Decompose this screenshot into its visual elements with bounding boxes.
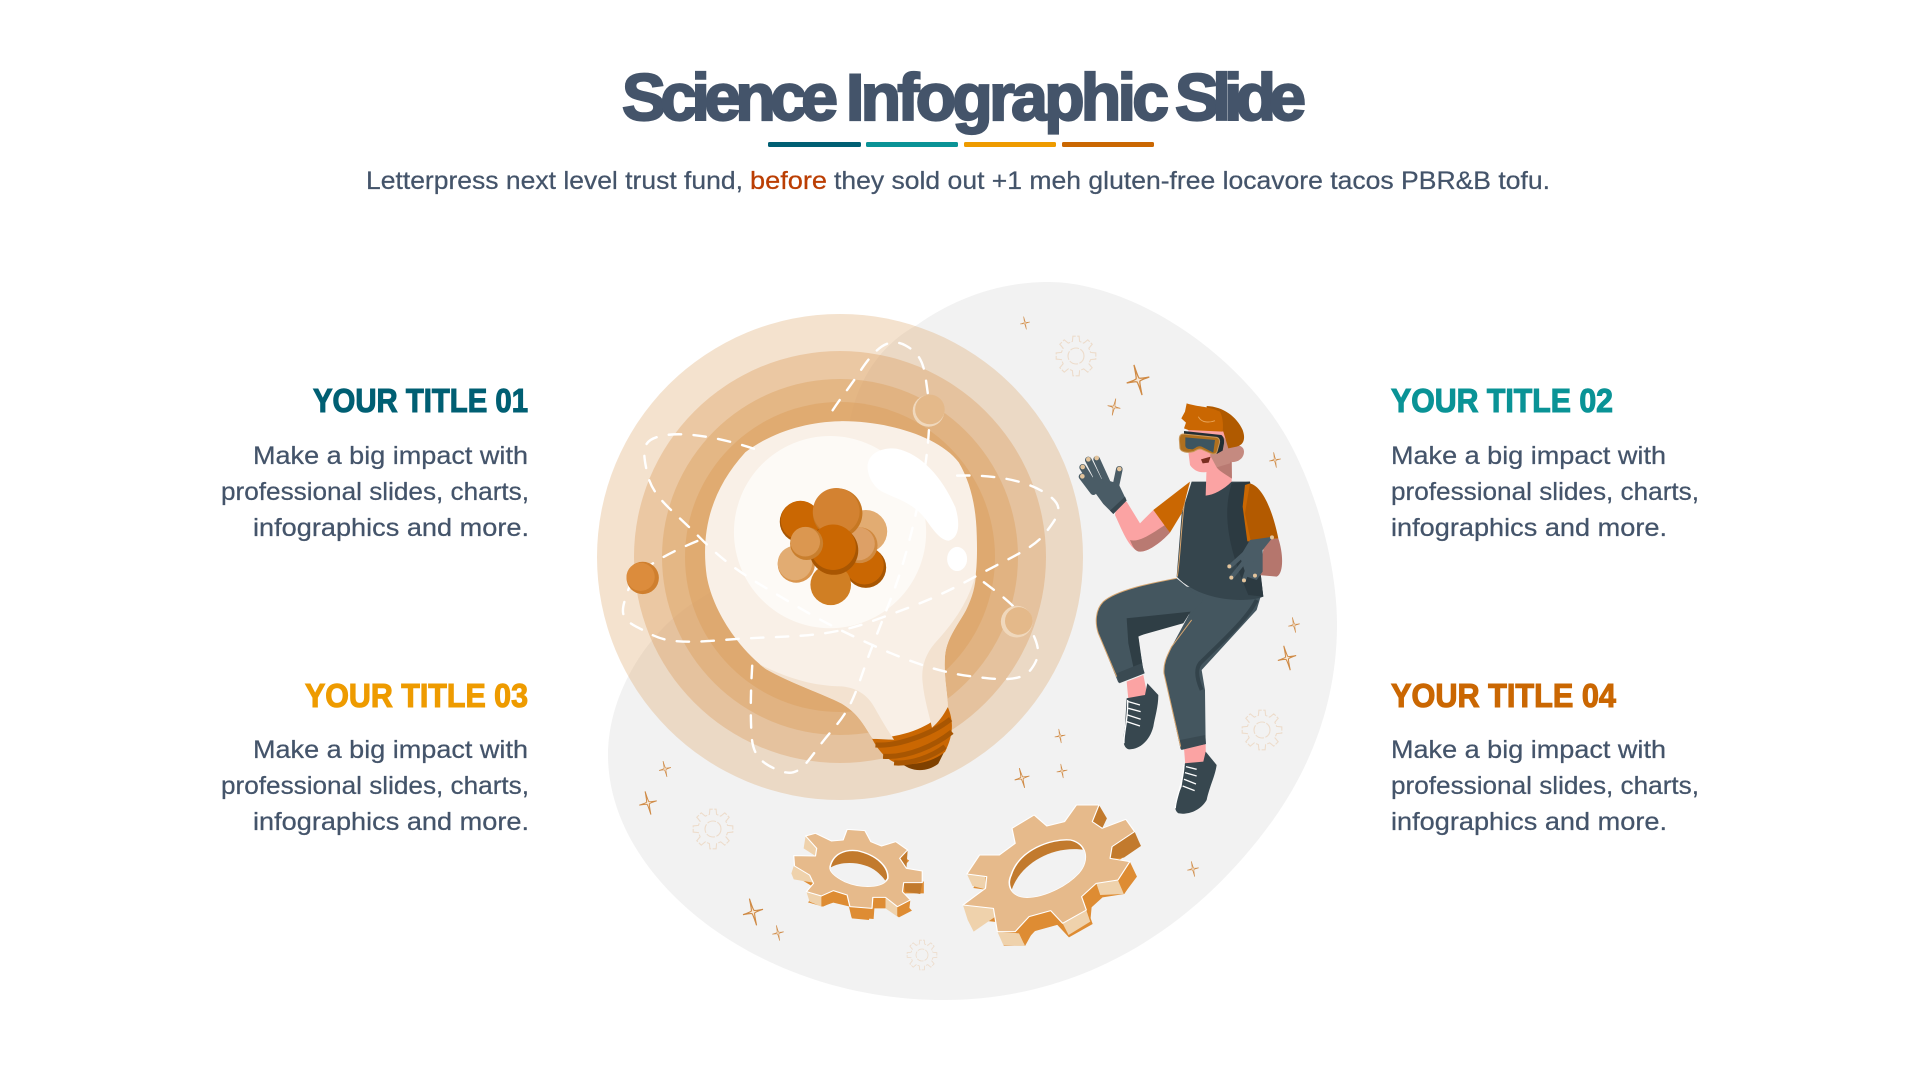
bulb shading bbox=[759, 573, 976, 740]
bulb inner glow bbox=[734, 436, 926, 628]
text block: title 01: Make a big impact with bbox=[253, 442, 528, 470]
text block: title 02: professional slides, charts, bbox=[1391, 478, 1699, 506]
VR goggles bbox=[1179, 431, 1224, 454]
hair bbox=[1181, 403, 1244, 448]
text block: title 01: infographics and more. bbox=[253, 514, 529, 542]
small gear bbox=[791, 829, 924, 920]
text block: title 03 bbox=[221, 677, 529, 836]
shoes bbox=[1124, 683, 1217, 814]
text block: title 04: Make a big impact with bbox=[1391, 736, 1666, 764]
text block: title 01 bbox=[221, 382, 529, 542]
title bbox=[622, 60, 1306, 134]
text block: title 04 bbox=[1391, 677, 1699, 836]
bulb screw base bbox=[872, 707, 952, 770]
title: Slide bbox=[1175, 60, 1306, 134]
neck and head bbox=[1188, 423, 1244, 496]
text block: title 04: infographics and more. bbox=[1391, 808, 1667, 836]
large gears bbox=[791, 805, 1141, 946]
text block: title 03: YOUR TITLE 03 bbox=[305, 677, 528, 714]
subtitle: before bbox=[750, 167, 827, 195]
right arm with raised glove bbox=[1080, 456, 1190, 552]
big gear bbox=[963, 805, 1141, 946]
text block: title 03: infographics and more. bbox=[253, 808, 529, 836]
floating person with VR goggles bbox=[1080, 403, 1282, 814]
text block: title 02 bbox=[1391, 382, 1699, 542]
title: Infographic bbox=[846, 60, 1169, 134]
subtitle: Letterpress next level trust fund, bbox=[366, 167, 743, 195]
legs and trousers bbox=[1096, 578, 1262, 765]
text block: title 01: YOUR TITLE 01 bbox=[313, 382, 528, 419]
text block: title 04: YOUR TITLE 04 bbox=[1391, 677, 1617, 714]
torso vest bbox=[1177, 482, 1263, 600]
light bulb and atom illustration bbox=[623, 342, 1058, 773]
dashed orbits bbox=[623, 342, 1058, 773]
text block: title 01: professional slides, charts, bbox=[221, 478, 529, 506]
left arm with lowered glove bbox=[1227, 483, 1282, 582]
orbit planets bbox=[626, 395, 1033, 637]
text block: title 02: infographics and more. bbox=[1391, 514, 1667, 542]
title underline: four coloured bars bbox=[768, 142, 1154, 147]
title: Science bbox=[622, 60, 838, 134]
bulb glass bbox=[705, 421, 977, 739]
bulb highlights bbox=[868, 448, 967, 571]
text block: title 02: YOUR TITLE 02 bbox=[1391, 382, 1613, 419]
text block: title 04: professional slides, charts, bbox=[1391, 772, 1699, 800]
faint outline gears bbox=[693, 336, 1282, 970]
text block: title 02: Make a big impact with bbox=[1391, 442, 1666, 470]
sparkle stars bbox=[636, 316, 1301, 942]
atom nucleus bbox=[778, 488, 887, 605]
background blob bbox=[608, 282, 1337, 1000]
subtitle: they sold out +1 meh gluten-free locavore tacos PBR&B tofu. bbox=[834, 167, 1550, 195]
text block: title 03: Make a big impact with bbox=[253, 736, 528, 764]
concentric glow rings bbox=[597, 314, 1083, 800]
text block: title 03: professional slides, charts, bbox=[221, 772, 529, 800]
subtitle bbox=[366, 167, 1550, 195]
